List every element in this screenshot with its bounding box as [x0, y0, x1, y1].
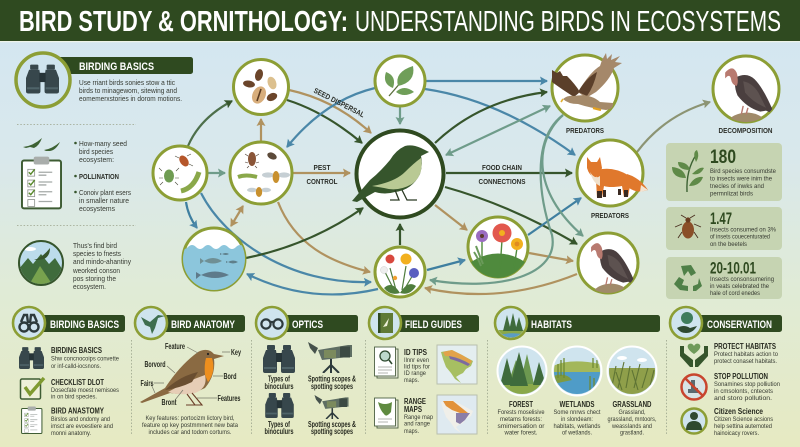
section: birding basics: BIRDING BASICS: [51, 346, 103, 355]
section: conservation: hainoicacy rovers.: [714, 430, 759, 437]
label: food chain connections: CONNECTIONS: [478, 177, 526, 186]
section: optics: binoculurs: [264, 382, 294, 391]
section: field guides: maps.: [404, 428, 419, 435]
section: optics: Spotting scopes &: [308, 374, 356, 384]
section: habitats: in slondeam:: [561, 416, 593, 423]
section: habitats: smimersation or: [498, 423, 545, 430]
panel: habitat note: [18, 241, 131, 291]
section: birding basics: [13, 307, 125, 437]
panel: stat 180: tnecles of inwks and: [710, 183, 764, 190]
node: hawk predator: [552, 53, 622, 121]
section: birding basics: Shw concnocoips convette: [51, 356, 119, 362]
section: habitats: water forest.: [504, 430, 538, 436]
panel: checklist with notes: [22, 138, 131, 213]
section: field guides: ID TIPS: [404, 348, 428, 357]
panel: stat 20-10.01: in veats celebrated the: [710, 283, 769, 290]
panel: stat 20-10.01: 20-10.01: [710, 260, 756, 278]
icon: binocular lenses: [261, 319, 283, 329]
section: field guides: lid tips for: [404, 364, 431, 370]
label: seed dispersal: SEED DISPERSAL: [312, 86, 367, 119]
node: insects middle: [230, 142, 292, 204]
panel: left birding basics intro: Use rriant birds sonies stow a ttic: [79, 78, 175, 87]
section: field guides: MAPS: [404, 405, 423, 414]
node: fox predator: [577, 140, 648, 206]
section: habitats: metams forests:: [500, 416, 542, 423]
panel: stat 180: permnlizat birds: [710, 190, 754, 198]
section: bird anatomy: Key: [231, 348, 241, 357]
section: field guides: Range map: [404, 414, 433, 421]
section: habitats: grastland.: [620, 430, 644, 436]
section: optics: [256, 307, 358, 436]
section: habitats: Some nnrws chect: [554, 409, 601, 416]
section: birding basics: BIRDING BASICS: [50, 319, 119, 331]
section: optics: Types of: [268, 420, 290, 429]
heading: birding basics: BIRDING BASICS: [79, 61, 154, 73]
section: conservation: help settina autemoted: [714, 423, 772, 430]
section: conservation: PROTECT HABITATS: [714, 342, 777, 351]
panel: stat 180: to insects were inim the: [710, 176, 772, 182]
section: birding basics: monni anatomy.: [51, 430, 91, 437]
panel: stat 1.47: Insects consumed on 3%: [710, 226, 776, 234]
section: birding basics: CHECKLIST DLOT: [51, 378, 104, 387]
panel: left birding basics intro: eomemerxstories in dorom motions.: [79, 94, 182, 103]
icon: beetle: [675, 215, 701, 238]
section: optics: OPTICS: [292, 319, 323, 331]
label: pest control: CONTROL: [306, 177, 338, 186]
icon: checkmark box: [20, 378, 44, 399]
section: optics: binoculurs: [264, 427, 294, 436]
section: conservation: and storo pollution.: [714, 395, 772, 402]
section: conservation: CONSERVATION: [707, 319, 772, 331]
panel: stat 1.47: of insets couecenturated: [710, 234, 770, 240]
section: birding basics: BIRD ANASTOMY: [51, 406, 105, 416]
node: central bird: [352, 130, 444, 218]
section: habitats: Forests moselisive: [498, 409, 545, 416]
section: habitats: grassland, mntoors,: [608, 416, 657, 423]
section: optics: spotting scopes: [311, 427, 353, 436]
node: leaf: [375, 56, 425, 106]
section: habitats: HABITATS: [531, 319, 572, 331]
panel: habitat note: and mindo-ahantiny: [73, 257, 131, 266]
panel: left birding basics intro: [16, 53, 193, 107]
icon: hummingbird: [141, 315, 165, 334]
icon: range maps document: [374, 398, 398, 428]
section: birding basics: Dosecfate moest nemisoes: [51, 387, 120, 394]
section: optics: spotting scopes: [311, 382, 353, 391]
panel: stat 1.47: on the beetels: [710, 241, 748, 248]
section: bird anatomy: includes car and todom cortums.: [148, 429, 232, 436]
panel: habitat note: Thus's find bird: [73, 241, 117, 250]
label: predators: PREDATORS: [566, 126, 604, 135]
panel: stat 20-10.01: [666, 257, 782, 299]
panel: checklist with notes: ecosystems: [79, 204, 115, 213]
section: habitats: weassIands and: [611, 423, 652, 430]
label: food chain connections: FOOD CHAIN: [482, 163, 522, 172]
section: habitats: habitats, wetlands: [554, 423, 601, 430]
panel: checklist with notes: How-many seed: [79, 139, 127, 148]
section: field guides: ID range: [404, 370, 426, 377]
icon: clipboard: [22, 157, 61, 208]
icon: binoculars one: [263, 345, 295, 373]
label: decomposition: DECOMPOSITION: [718, 126, 772, 135]
section: birding basics: or inf-calld-iocsnons.: [51, 363, 101, 370]
panel: habitat note: species to fnests: [73, 249, 121, 258]
illustration: forest: [498, 346, 546, 396]
icon: spotting scope two: [314, 395, 349, 419]
node: decomposition: [713, 56, 779, 123]
section: bird anatomy: Borvord: [144, 360, 166, 369]
icon: leaves: [385, 66, 414, 96]
panel: stat 20-10.01: hale of cord enedes: [710, 290, 761, 297]
icon: binoculars: [19, 347, 44, 369]
icon: no pollution: [682, 374, 706, 400]
icon: binoculars two: [265, 393, 294, 418]
icon: mountain with bird: [18, 241, 64, 290]
panel: habitat note: pos storing the: [73, 274, 116, 283]
section: habitats: Grassland,: [618, 409, 646, 416]
icon: citizen person: [682, 408, 706, 434]
section: bird anatomy: feature op key postmmnent new bata: [142, 422, 238, 429]
panel: checklist with notes: ecosystem:: [79, 155, 114, 164]
illustration: grassland: [608, 346, 656, 396]
section: field guides: and range: [404, 420, 430, 428]
arrows: ecosystem connections: [186, 81, 710, 294]
icon: robin diagram: [140, 350, 224, 405]
section: field guides: Ilnnr even: [404, 357, 429, 364]
icon: book: [378, 313, 393, 333]
section: conservation: Protect habitats action to: [714, 351, 778, 358]
node: large flowers: [468, 217, 528, 278]
panel: stat 20-10.01: Insects consonsumering: [710, 276, 774, 283]
icon: songbird: [352, 145, 429, 202]
label: food chain connections: [478, 163, 526, 186]
section: conservation: Citizen Science: [714, 407, 763, 416]
section: conservation: in cmsolonts, cntecets: [714, 388, 774, 395]
section: habitats: of wetlands.: [562, 430, 592, 436]
panel: checklist with notes: POLLINATION: [79, 172, 119, 181]
panel: left birding basics intro: birds to minagewom, sitewing and: [79, 86, 177, 95]
section: habitats: [495, 307, 660, 436]
label: predators second: PREDATORS: [591, 211, 629, 220]
icon: branch: [672, 150, 704, 192]
icon: globe in hand: [677, 312, 697, 333]
icon: fox: [587, 157, 648, 198]
icon: spotting scope one: [308, 342, 352, 373]
section: habitats: FOREST: [509, 400, 533, 409]
illustration: wetlands: [552, 346, 602, 396]
panel: checklist with notes: in smaller nature: [79, 196, 129, 205]
node: water with fish: [182, 226, 246, 292]
section: field guides: [369, 307, 479, 435]
node: vulture: [578, 233, 638, 293]
anatomy callout lines: [151, 347, 230, 400]
icon: birds flying: [23, 138, 60, 151]
title banner: [0, 0, 800, 42]
section: bird anatomy: BIRD ANATOMY: [171, 319, 235, 331]
panel: checklist with notes: bird species: [79, 147, 113, 156]
section: conservation: protect conaset habitats.: [714, 358, 777, 365]
icon: hands with heart: [680, 344, 708, 367]
section: conservation: STOP POLLUTION: [714, 372, 768, 381]
section: birding basics: imsct are evoestiere and: [51, 423, 113, 430]
icon: hawk: [552, 53, 622, 110]
icon: round binoculars: [20, 315, 38, 332]
panel: habitat note: ecosystem.: [73, 282, 106, 291]
node: small flowers: [375, 247, 425, 297]
section: bird anatomy: Bront: [162, 398, 177, 407]
panel: stat 180: [666, 143, 782, 201]
section: bird anatomy: Fairs: [140, 379, 154, 388]
section: birding basics: Birslos and ondomy and: [51, 416, 110, 423]
panel: checklist with notes: Conoiv plant esers: [79, 188, 131, 197]
label: pest control: PEST: [314, 163, 331, 172]
section: conservation: Citizen Science acsions: [714, 416, 774, 423]
panel: stat 1.47: [666, 207, 782, 250]
section: birding basics: in on bird species.: [51, 394, 97, 400]
panel: stat 180: Bird species consumdste: [710, 168, 776, 175]
section: conservation: Sonamines stop polliution: [714, 381, 780, 388]
map: north america two: [437, 395, 477, 434]
label: pest control: [306, 163, 338, 186]
panel: stat 1.47: 1.47: [710, 210, 732, 228]
section: optics: Types of: [268, 374, 290, 384]
section: optics: Spotting scopes &: [308, 420, 356, 429]
icon: recycle: [674, 265, 702, 291]
section: habitats: WETLANDS: [560, 400, 595, 409]
section: habitats: GRASSLAND: [612, 400, 652, 409]
section: bird anatomy: Key features: portocizm lictory bird,: [146, 415, 235, 422]
section: bird anatomy: Feature: [165, 342, 185, 351]
icon: small clipboard: [22, 407, 42, 433]
section: field guides: FIELD GUIDES: [405, 319, 462, 331]
panel: stat 180: 180: [710, 146, 736, 168]
node: insects left: [153, 146, 207, 200]
section: conservation: [670, 307, 782, 437]
map: north america one: [437, 345, 477, 384]
section: bird anatomy: [135, 307, 245, 436]
section: field guides: RANGE: [404, 397, 427, 406]
section: bird anatomy: Features: [218, 394, 241, 403]
icon: small forest: [498, 313, 524, 338]
section: bird anatomy: Bord: [224, 372, 237, 381]
section: field guides: maps.: [404, 377, 419, 384]
title bold part: BIRD STUDY & ORNITHOLOGY:: [19, 6, 348, 38]
node: seeds: [234, 60, 288, 114]
icon: id tips document: [374, 347, 398, 378]
panel: habitat note: weorked conson: [72, 266, 120, 275]
